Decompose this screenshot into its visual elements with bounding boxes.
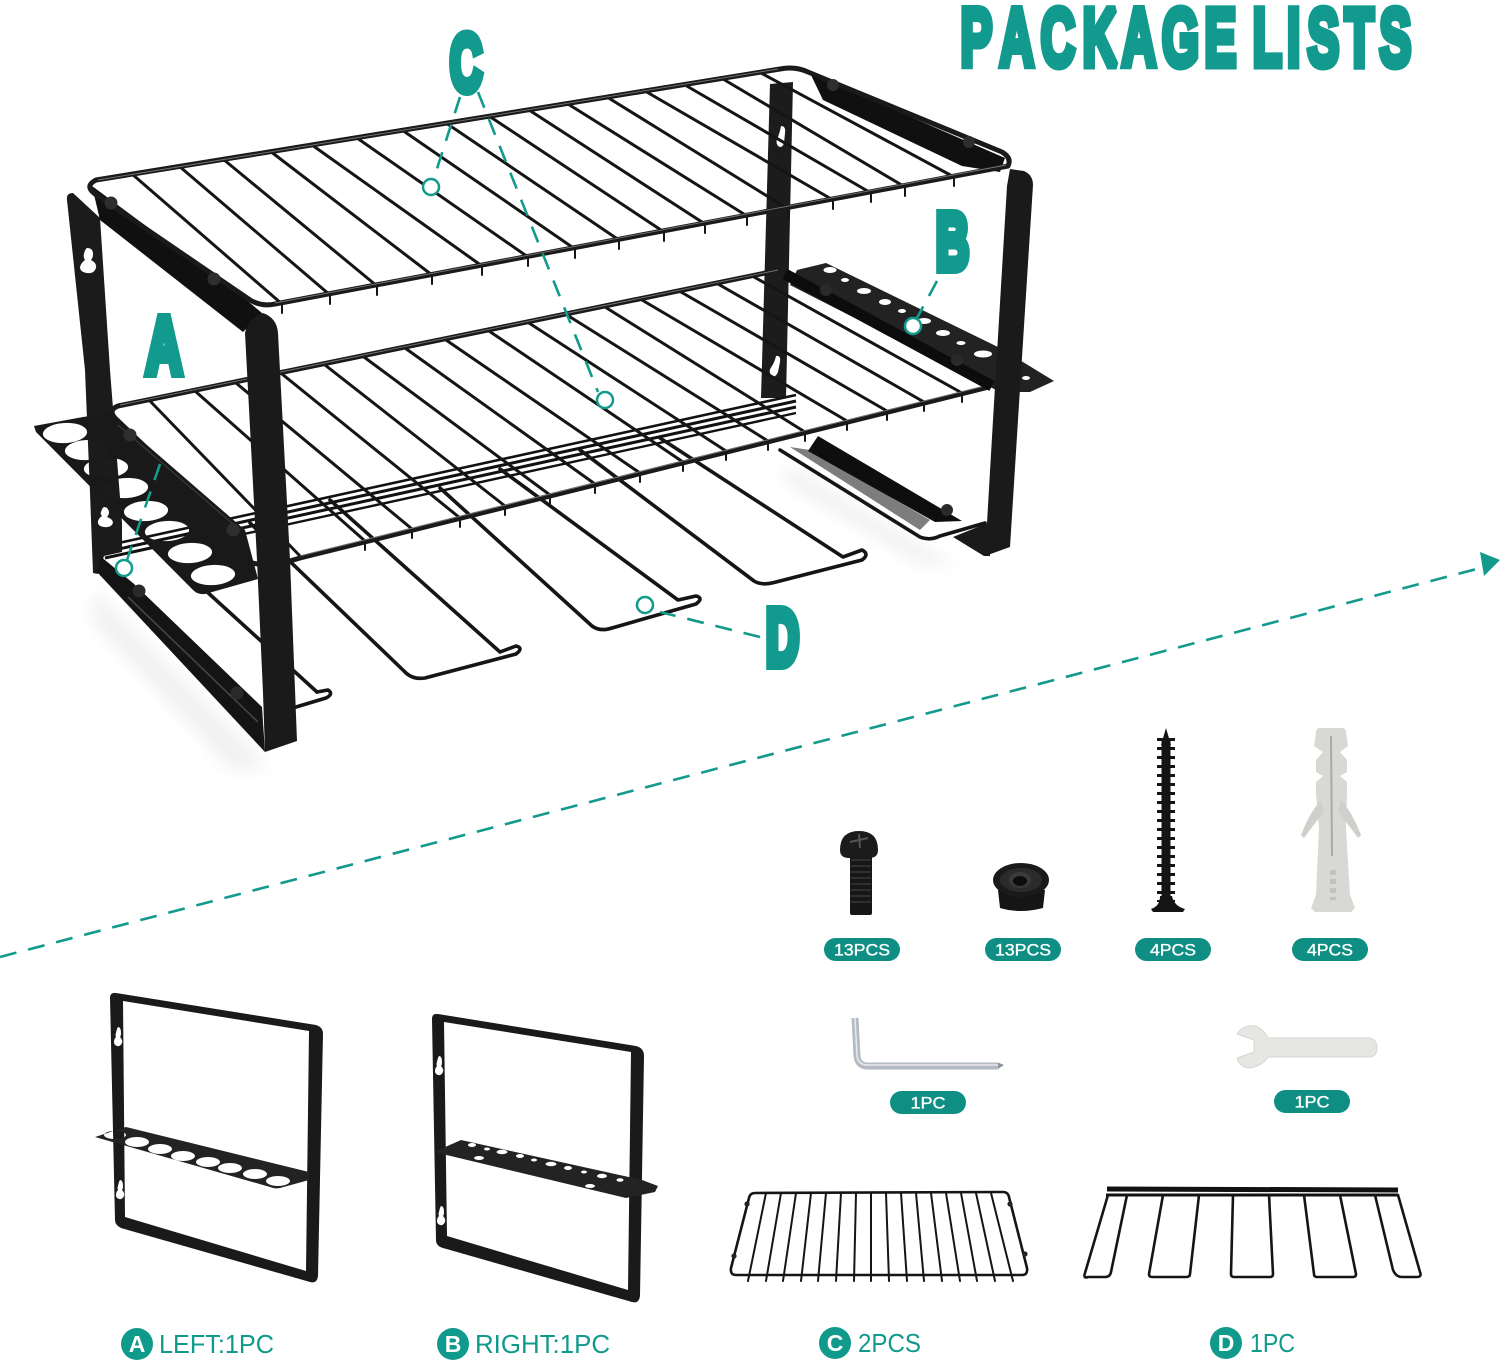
- pill: 1PC key: 1PC: [910, 1094, 946, 1112]
- part B: right bracket: [432, 1014, 658, 1302]
- hardware: L-shaped screwdriver key 1pc: [855, 1018, 1004, 1069]
- letter C callout: C: [450, 18, 482, 107]
- letter B callout: B: [936, 197, 969, 286]
- hardware: flat wrench 1pc: [1237, 1026, 1377, 1068]
- right bracket front upright: [985, 169, 1033, 556]
- label: D 1PC: D: [1218, 1330, 1234, 1356]
- lower prong rack D: [105, 395, 985, 707]
- label: A LEFT 1PC: LEFT:1PC: [159, 1329, 274, 1359]
- pill: 13PCS bolt: 13PCS: [834, 940, 890, 960]
- pill: 4PCS anchor: 4PCS: [1307, 940, 1353, 960]
- label: B RIGHT 1PC: RIGHT:1PC: [475, 1329, 610, 1359]
- pill: 4PCS screw: 4PCS: [1150, 940, 1196, 960]
- top wire shelf C: [90, 68, 1009, 332]
- label: D 1PC: 1PC: [1250, 1328, 1295, 1358]
- left bracket rear upright: [67, 193, 122, 574]
- pill: 1PC wrench: [1274, 1090, 1350, 1113]
- label: C 2PCS: [819, 1327, 921, 1359]
- label: C 2PCS: 2PCS: [858, 1328, 921, 1358]
- left bracket front upright: [245, 313, 297, 752]
- hardware: long wood screw 4pcs: [1151, 728, 1185, 912]
- label: C 2PCS: C: [827, 1330, 843, 1356]
- right lower bracket band: [790, 436, 990, 556]
- hardware: flange nut 13pcs: [993, 863, 1049, 911]
- letter B callout: [905, 197, 969, 334]
- part C: wire shelf: [731, 1192, 1028, 1281]
- pill: 4PCS anchor: [1292, 938, 1368, 961]
- diagonal dashed arrow: [0, 552, 1500, 957]
- middle wire shelf C: [112, 270, 990, 565]
- soft floor shadows: [90, 465, 960, 770]
- part D: prong rack: [1084, 1189, 1421, 1278]
- label: A LEFT 1PC: A: [129, 1331, 145, 1357]
- label: B RIGHT 1PC: B: [445, 1331, 461, 1357]
- pill: 13PCS bolt: [824, 938, 900, 961]
- right rear upright: [761, 82, 793, 398]
- left tool tray with round holes: [34, 413, 258, 594]
- pill: 13PCS nut: 13PCS: [995, 940, 1051, 960]
- pill: 1PC key: [890, 1091, 966, 1114]
- letter A callout: [116, 301, 182, 576]
- label: D 1PC: [1210, 1327, 1295, 1359]
- pill: 13PCS nut: [985, 938, 1061, 961]
- letter D callout: D: [766, 593, 799, 682]
- letter A callout: A: [146, 301, 182, 390]
- pill: 1PC wrench: 1PC: [1294, 1092, 1330, 1112]
- letter D callout: [637, 593, 799, 682]
- hardware: plastic wall anchor 4pcs: [1301, 728, 1361, 912]
- assembled rack illustration: [34, 68, 1054, 770]
- left lower bracket band: [97, 556, 265, 752]
- hardware: bolt 13pcs: [840, 831, 878, 915]
- label: A LEFT 1PC: [121, 1328, 274, 1360]
- part A: left bracket: [95, 993, 323, 1282]
- letter C callout: [423, 18, 613, 408]
- pill: 4PCS screw: [1135, 938, 1211, 961]
- right tool tray with small holes: [785, 263, 1054, 392]
